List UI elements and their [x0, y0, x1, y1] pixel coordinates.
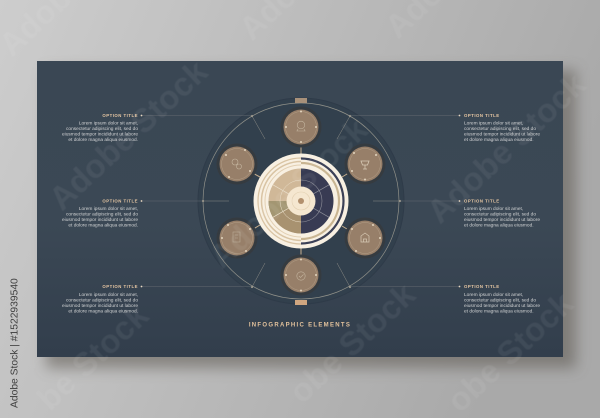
option left 1 — [62, 113, 138, 143]
option right 3: consectetur adipiscing elit, sed do — [464, 298, 536, 304]
panel — [37, 61, 563, 357]
option right 2: consectetur adipiscing elit, sed do — [464, 212, 536, 218]
option left 3: et dolore magna aliqua eiusmod. — [68, 308, 138, 314]
option left 1: et dolore magna aliqua eiusmod. — [68, 137, 138, 143]
option right 2: eiusmod tempor incididunt ut labore — [464, 217, 540, 223]
option right 3: eiusmod tempor incididunt ut labore — [464, 303, 540, 309]
option left 3 — [62, 284, 138, 314]
option right 1: OPTION TITLE — [464, 113, 500, 118]
option left 3: Lorem ipsum dolor sit amet, — [79, 292, 138, 298]
hub left half rings — [257, 157, 301, 245]
option left 1: consectetur adipiscing elit, sed do — [66, 126, 138, 132]
option left 1: eiusmod tempor incididunt ut labore — [62, 132, 138, 138]
stock id label: Adobe Stock | #1522939540 — [10, 278, 20, 408]
option right 3: et dolore magna aliqua eiusmod. — [464, 308, 534, 314]
option right 1: et dolore magna aliqua eiusmod. — [464, 137, 534, 143]
icon: document — [233, 232, 240, 242]
title: INFOGRAPHIC ELEMENTS — [249, 322, 351, 328]
option left 2: OPTION TITLE — [102, 198, 138, 204]
option left 3: eiusmod tempor incididunt ut labore — [62, 303, 138, 309]
icon: trophy — [361, 161, 369, 169]
diagram: radial wheel — [198, 98, 404, 305]
bottom tab — [295, 300, 307, 305]
icon: gears — [232, 159, 242, 169]
option right 2: et dolore magna aliqua eiusmod. — [464, 222, 534, 228]
option left 2: eiusmod tempor incididunt ut labore — [62, 217, 138, 223]
option right 2 — [464, 198, 540, 228]
top tab — [295, 98, 307, 103]
option left 3: consectetur adipiscing elit, sed do — [66, 298, 138, 304]
central hub — [254, 154, 348, 248]
option left 1: Lorem ipsum dolor sit amet, — [79, 120, 138, 126]
option left 2: consectetur adipiscing elit, sed do — [66, 212, 138, 218]
option right 2: OPTION TITLE — [464, 198, 500, 204]
panel shadow — [46, 70, 576, 368]
option right 1 — [464, 113, 540, 143]
option left 2: et dolore magna aliqua eiusmod. — [68, 222, 138, 228]
option left 2 — [62, 198, 138, 228]
node: lower right — [344, 218, 386, 258]
option right 3 — [464, 284, 540, 314]
icon: building — [361, 233, 369, 242]
icon: clock check — [297, 272, 305, 280]
option right 3: Lorem ipsum dolor sit amet, — [464, 292, 523, 298]
hub right half rings — [301, 157, 345, 245]
node: upper left — [216, 144, 258, 184]
watermarks: obe Stock — [282, 275, 423, 410]
radial ticks — [202, 115, 401, 288]
node: upper right — [344, 144, 386, 184]
option right 1: Lorem ipsum dolor sit amet, — [464, 120, 523, 126]
watermarks: Adobe Stock — [420, 65, 593, 230]
watermarks: be Stock — [30, 296, 156, 417]
option right 1: consectetur adipiscing elit, sed do — [464, 126, 536, 132]
option right 2: Lorem ipsum dolor sit amet, — [464, 206, 523, 212]
option right 1: eiusmod tempor incididunt ut labore — [464, 132, 540, 138]
icon: gauge head — [296, 121, 306, 131]
watermarks: Adobe Stock — [202, 110, 375, 275]
option left 1: OPTION TITLE — [102, 113, 138, 118]
outer disc — [198, 98, 404, 304]
thin ring — [203, 103, 399, 299]
option left 3: OPTION TITLE — [102, 284, 138, 289]
connectors — [249, 142, 352, 261]
watermarks: Adobe Stock — [42, 52, 215, 217]
option right 3: OPTION TITLE — [464, 284, 500, 289]
left leader lines — [142, 116, 252, 286]
node: top — [280, 106, 322, 148]
leader end dots — [141, 115, 460, 287]
node: lower left — [216, 218, 258, 258]
watermarks: obe Stock — [440, 284, 581, 418]
right leader lines — [350, 116, 459, 286]
option left 2: Lorem ipsum dolor sit amet, — [79, 206, 138, 212]
node: bottom — [280, 254, 322, 296]
